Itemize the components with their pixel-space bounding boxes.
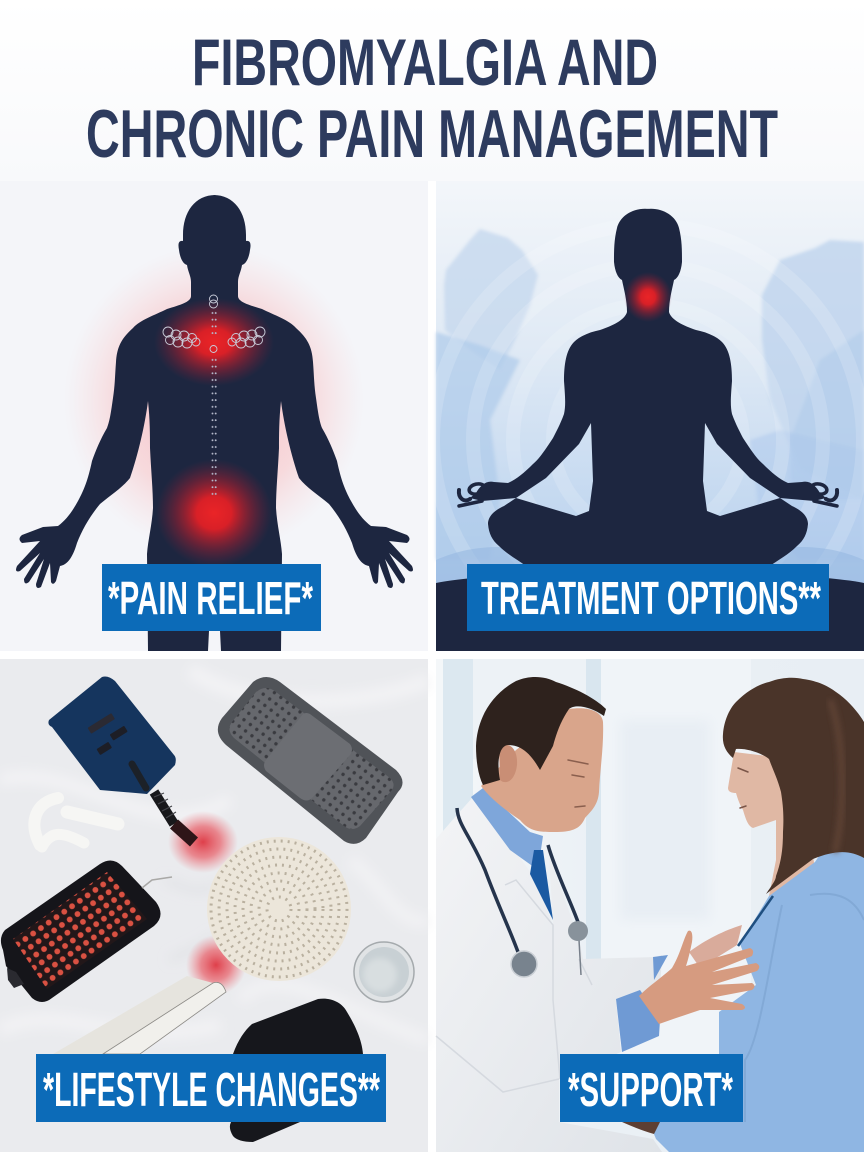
shirt seams [738, 894, 864, 1122]
icon: right mudra hand [810, 482, 837, 506]
patient hair [723, 678, 864, 894]
doctor sleeve cuff [616, 990, 660, 1052]
red body glow [64, 245, 364, 555]
patient face details [738, 768, 748, 808]
panel: pain relief [0, 181, 428, 651]
background rock shapes [436, 229, 864, 560]
label: pain relief: *PAIN RELIEF* [108, 572, 313, 624]
doctor hand [639, 931, 759, 1024]
doctor face details [568, 760, 588, 807]
label: lifestyle changes: *LIFESTYLE CHANGES** [43, 1064, 380, 1117]
doctor coat [436, 797, 662, 1152]
label: support: *SUPPORT* [568, 1064, 733, 1117]
label: pain relief [102, 564, 321, 631]
lower hill [436, 547, 864, 590]
patient lap hand [622, 1122, 660, 1134]
doctor figure [436, 677, 668, 1152]
spine dots [211, 310, 218, 498]
coat folds [436, 880, 592, 1092]
icon: white boards [53, 976, 226, 1054]
panel: support [436, 659, 864, 1152]
label: lifestyle changes [36, 1054, 386, 1122]
shoulder nerve clusters [163, 295, 265, 352]
stethoscope [457, 808, 581, 975]
icon: meditating silhouette [470, 209, 826, 590]
ground band [436, 572, 864, 651]
sheet wrinkles [0, 670, 428, 1040]
icon: red LED pad [1, 860, 172, 1002]
neck pain spot [624, 272, 672, 322]
upper back pain spot [154, 298, 274, 386]
label: treatment options [467, 564, 829, 631]
patient figure [639, 678, 864, 1152]
page background [0, 0, 864, 181]
icon: red light spot lower [186, 935, 246, 995]
window light bands [443, 659, 751, 1059]
doctor ear [499, 745, 517, 782]
panel: treatment options [433, 181, 864, 655]
icon: navy heat pad [48, 676, 194, 842]
panel: lifestyle changes [0, 659, 428, 1152]
doctor necktie [530, 850, 553, 920]
doctor neck and face [481, 708, 603, 832]
icon: white tube [34, 798, 118, 847]
patient neck and face [728, 752, 815, 896]
patient shirt [649, 841, 864, 1152]
title [86, 25, 778, 172]
doctor hair [476, 677, 606, 785]
icon: red light spot [168, 811, 238, 873]
title: FIBROMYALGIA AND [192, 25, 658, 99]
icon: left mudra hand [459, 482, 486, 506]
label: support [560, 1054, 743, 1122]
icon: round ivory mat [207, 837, 351, 981]
lower back pain spot [156, 459, 272, 567]
icon: glass dish [354, 942, 414, 1002]
icon: black cushion [230, 999, 363, 1142]
patient arm [689, 925, 742, 968]
concentric rings [433, 225, 863, 655]
icon: human body silhouette [16, 195, 413, 651]
icon: gray massage pad [218, 677, 403, 844]
doctor shirt collar [471, 788, 543, 870]
